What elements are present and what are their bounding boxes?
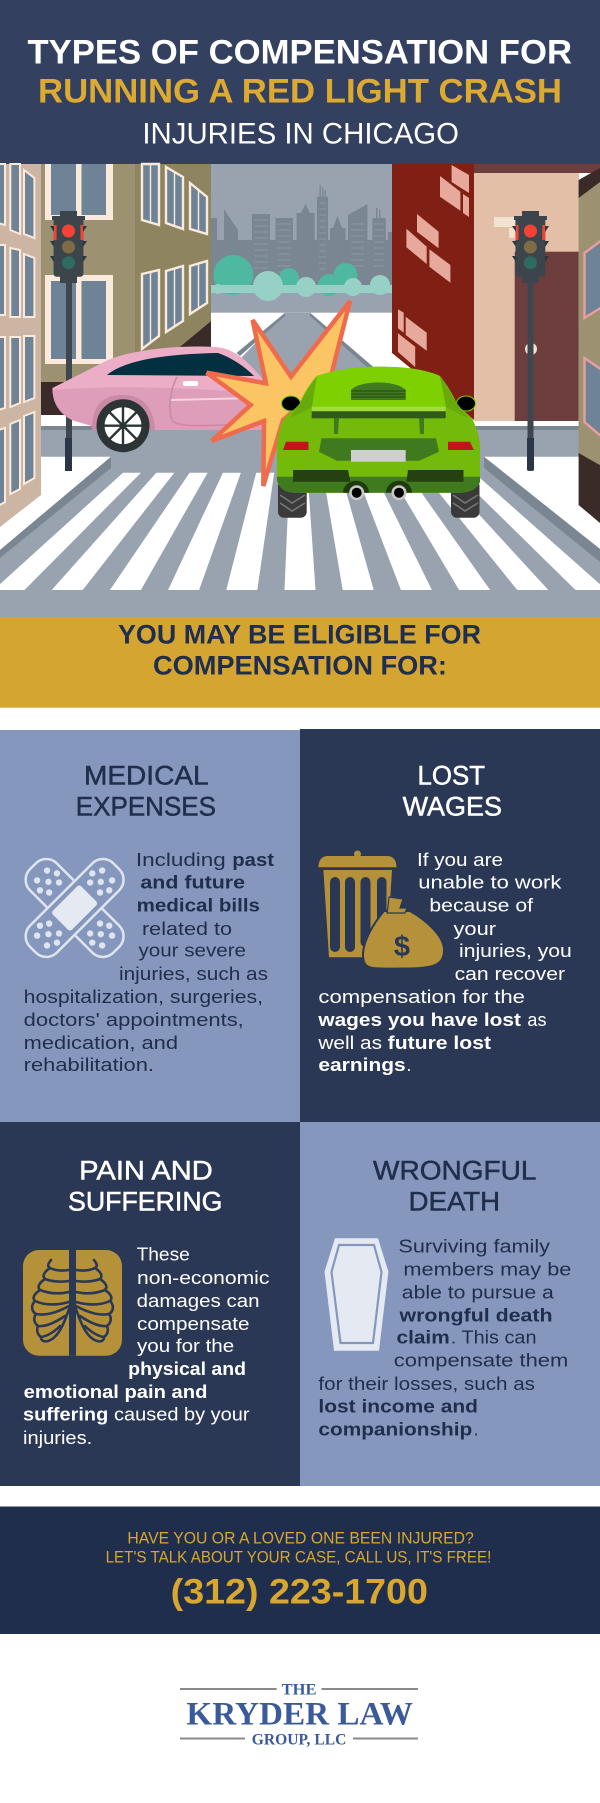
text: medical expenses body: doctors' appointments, [24,1010,244,1030]
text: pain and suffering body: injuries. [23,1428,92,1448]
call to action band: LET'S TALK ABOUT YOUR CASE, CALL US, IT'S FREE! [106,1549,491,1567]
text: wrongful death body: compensate them [394,1351,568,1371]
text: wrongful death body: able to pursue a [402,1283,555,1303]
exhausts [343,481,412,500]
text: wrongful death body: claim [396,1328,450,1348]
text: wrongful death body: . [474,1419,479,1439]
tail lights [283,442,474,450]
panel: lost wages [300,729,600,1122]
text: medical expenses body: related to [142,919,232,939]
heading: lost wages: LOST [418,760,485,790]
heading: lost wages: WAGES [403,791,502,821]
header banner [0,0,600,164]
text: lost wages body: future lost [388,1033,491,1053]
title line 1: TYPES OF COMPENSATION FOR [28,33,572,71]
text: lost wages body: as [527,1010,546,1030]
text: pain and suffering body: suffering [23,1405,108,1425]
text: lost wages body: injuries, you [459,941,572,961]
text: medical expenses body: injuries, such as [119,964,268,984]
number plate [351,450,406,462]
panel: medical expenses [0,730,300,1122]
text: wrongful death body: for their losses, such as [318,1374,535,1394]
icon: trash can and money bag: $ [394,931,410,963]
far left building [0,164,41,527]
rear vent [351,382,406,400]
heading: medical expenses: MEDICAL [84,760,209,790]
heading: pain and suffering: SUFFERING [68,1186,222,1216]
text: pain and suffering body: compensate [137,1314,250,1334]
heading: lost wages [403,760,502,821]
olive building [41,164,211,415]
text: wrongful death body: wrongful death [398,1306,553,1326]
text: medical expenses body: and future [140,873,245,893]
right traffic light [512,211,549,471]
phone number: (312) 223-1700 [171,1572,428,1611]
text: wrongful death body: . This can [451,1328,536,1348]
heading: wrongful death: DEATH [409,1186,500,1216]
illustration: street crash scene [0,164,600,617]
text: medical expenses body: your severe [138,941,246,961]
right edge building [579,168,600,523]
text: lost wages body: unable to work [418,873,563,893]
text: pain and suffering body: you for the [137,1336,234,1356]
explosion [207,301,350,486]
text: pain and suffering body: damages can [137,1291,260,1311]
heading: medical expenses: EXPENSES [76,791,216,821]
text: medical expenses body: medical bills [137,896,260,916]
pink car [52,347,262,452]
logo: The Kryder Law Group, LLC: GROUP, LLC [252,1731,346,1748]
text: medical expenses body: medication, and [24,1033,178,1053]
ground and sidewalks [0,164,600,617]
text: pain and suffering body [23,1245,269,1448]
text: wrongful death body: lost income and [318,1397,478,1417]
red brick building [392,164,474,420]
text: lost wages body: your [454,919,496,939]
beige building with door [474,164,600,421]
call to action band [0,1506,600,1634]
bumper grilles [293,470,464,482]
text: lost wages body: can recover [455,964,565,984]
heading: pain and suffering [68,1155,222,1216]
text: lost wages body: . [406,1055,411,1075]
green car [277,367,480,518]
sky and skyline [211,164,392,313]
text: medical expenses body: Including [136,850,226,870]
text: lost wages body: wages you have lost [317,1010,521,1030]
text: wrongful death body: members may be [403,1260,571,1280]
heading: pain and suffering: PAIN AND [79,1155,213,1185]
text: pain and suffering body: physical and [128,1359,246,1379]
side mirrors [282,396,476,411]
text: wrongful death body: companionship [318,1419,472,1439]
text: medical expenses body: past [232,850,274,870]
heading: wrongful death: WRONGFUL [373,1155,536,1185]
heading: medical expenses [76,760,216,821]
crosswalk stripes [0,473,600,590]
panel: wrongful death [300,1122,600,1486]
text: wrongful death body: Surviving family [398,1237,550,1257]
rear tires [278,480,480,518]
call to action band: HAVE YOU OR A LOVED ONE BEEN INJURED? [127,1529,474,1547]
text: medical expenses body: hospitalization, surgeries, [24,987,263,1007]
icon: crossed bandages [19,853,130,963]
title line 2: RUNNING A RED LIGHT CRASH [38,73,562,111]
text: lost wages body: If you are [417,850,503,870]
logo: The Kryder Law Group, LLC: THE [282,1681,316,1698]
text: pain and suffering body: non-economic [137,1268,269,1288]
logo: The Kryder Law Group, LLC: KRYDER LAW [186,1697,413,1733]
logo: The Kryder Law Group, LLC [180,1681,418,1748]
text: pain and suffering body: caused by your [114,1405,250,1425]
spoiler [312,407,446,434]
icon: rib cage [23,1250,122,1356]
text: pain and suffering body: emotional pain and [24,1382,207,1402]
eligibility banner [0,617,600,708]
title line 3: INJURIES IN CHICAGO [142,118,459,151]
text: lost wages body: because of [429,896,534,916]
heading: wrongful death [373,1155,536,1216]
icon: trash can and money bag [318,850,444,969]
text: lost wages body [317,850,572,1075]
trees [211,255,392,301]
panel: pain and suffering [0,1122,300,1486]
text: pain and suffering body: These [137,1245,190,1265]
text: wrongful death body [318,1237,571,1439]
dark trim panel [319,438,439,461]
text: lost wages body: compensation for the [318,987,525,1007]
eligibility banner: YOU MAY BE ELIGIBLE FOR [118,619,481,649]
icon: coffin [324,1238,388,1351]
text: lost wages body: well as [317,1033,382,1053]
eligibility banner: COMPENSATION FOR: [153,650,447,680]
text: medical expenses body: rehabilitation. [24,1055,154,1075]
text: lost wages body: earnings [318,1055,406,1075]
text: medical expenses body [24,850,274,1075]
left traffic light [50,211,87,471]
